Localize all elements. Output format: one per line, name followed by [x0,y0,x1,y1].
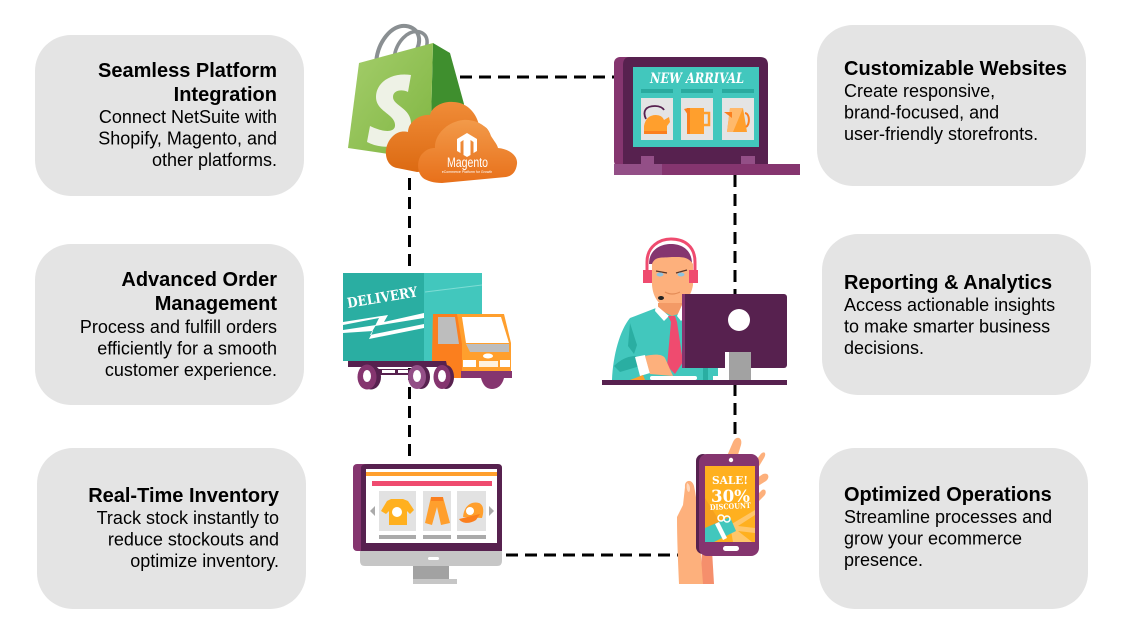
icon: delivery truck [343,273,512,390]
text: seamless platform integration description: Shopify, Magento, and [98,128,277,148]
text: advanced order management description: customer experience. [105,360,277,380]
text: reporting and analytics description: to make smarter business [844,316,1050,336]
icon: delivery truck: DELIVERY [346,284,420,312]
text: optimized operations description: Streamline processes and [844,507,1052,527]
panel: optimized operations [819,448,1088,609]
panel: reporting and analytics [822,234,1091,395]
heading: optimized operations: Optimized Operations [844,484,1052,506]
icon: support agent at monitor [602,239,787,385]
icon: hand holding phone with sale: DISCOUNT [710,501,751,512]
text: advanced order management description: efficiently for a smooth [97,338,277,358]
text: reporting and analytics description: decisions. [844,338,924,358]
text: real-time inventory description: Track stock instantly to [97,508,279,528]
heading: reporting and analytics: Reporting & Analytics [844,272,1052,294]
text: optimized operations description: presence. [844,550,923,570]
panel: seamless platform integration [35,35,304,196]
text: optimized operations description: grow your ecommerce [844,528,1022,548]
icon: shopify bag and magento cloud [348,26,517,183]
text: real-time inventory description: optimize inventory. [130,551,279,571]
icon: hand holding phone with sale: 30% [711,487,750,507]
heading: real-time inventory: Real-Time Inventory [88,485,280,507]
icon: hand holding phone with sale [677,438,768,584]
icon: shopify bag and magento cloud: Magento [447,155,488,170]
icon: laptop storefront [614,57,800,175]
heading: seamless platform integration: Seamless Platform [98,60,277,82]
icon: hand holding phone with sale: SALE! [712,473,748,487]
text: customizable websites description: Create responsive, [844,81,995,101]
text: customizable websites description: brand-focused, and [844,102,999,122]
text: seamless platform integration description: Connect NetSuite with [99,107,277,127]
text: advanced order management description: Process and fulfill orders [80,317,277,337]
panel: real-time inventory [37,448,306,609]
text: customizable websites description: user-friendly storefronts. [844,124,1038,144]
dashed connectors [410,77,735,555]
text: real-time inventory description: reduce stockouts and [108,530,279,550]
text: reporting and analytics description: Access actionable insights [844,295,1055,315]
text: seamless platform integration description: other platforms. [152,150,277,170]
icon: desktop shop catalogue [353,464,502,584]
icon: shopify bag and magento cloud: eCommerce Platform for Growth [442,170,492,174]
heading: customizable websites: Customizable Websites [844,58,1067,80]
heading: advanced order management: Advanced Order [121,269,277,291]
panel: advanced order management [35,244,304,405]
heading: seamless platform integration: Integration [174,84,277,106]
panel: customizable websites [817,25,1086,186]
heading: advanced order management: Management [155,293,277,315]
icon: laptop storefront: NEW ARRIVAL [649,71,744,87]
